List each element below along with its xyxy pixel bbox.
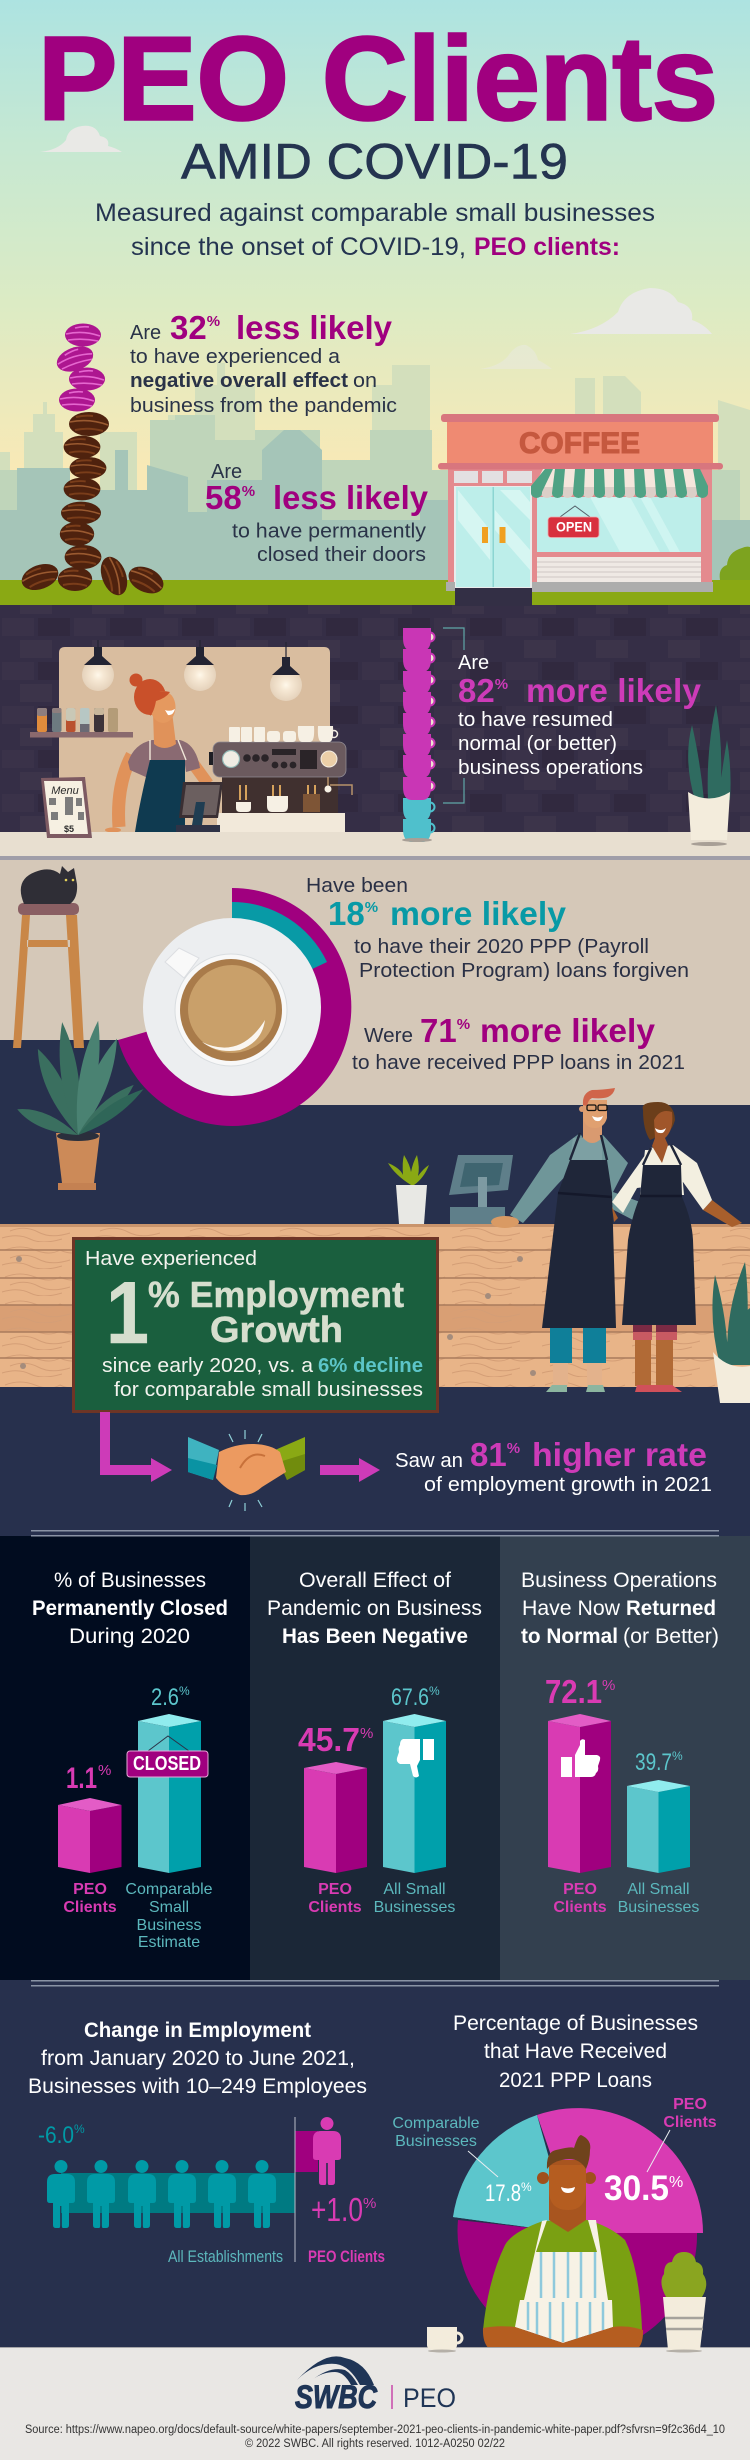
- stat: 81% higher rate: higher rate: [532, 1436, 707, 1473]
- lower navy section: [0, 1980, 750, 2348]
- stat: 32% less likely: Are: [130, 322, 161, 344]
- man: [491, 1088, 640, 1392]
- intro text: PEO clients:: [474, 233, 620, 261]
- chalkboard comparison: since early 2020, vs. a: [102, 1355, 314, 1377]
- spice shelf: [30, 708, 133, 738]
- stat: 18% more likely: %: [365, 899, 378, 916]
- woman: [612, 1102, 742, 1392]
- arrow from chalkboard: [100, 1412, 172, 1482]
- heading: [521, 1569, 719, 1648]
- stat: 58% less likely: closed their doors: [257, 544, 426, 566]
- bar: PEO clients 72.1%: 72.1: [545, 1673, 602, 1710]
- bar: comparable 2.6%: 2.6: [151, 1684, 179, 1711]
- coffee bean stack: [53, 324, 109, 569]
- donut chart with coffee cup: [118, 888, 351, 1126]
- stat: 71% more likely: 71: [420, 1012, 457, 1049]
- open sign: [548, 506, 599, 538]
- intro text: since the onset of COVID-19,: [131, 233, 466, 261]
- stat: 71% more likely: %: [457, 1016, 470, 1033]
- couple of baristas: [491, 1088, 742, 1392]
- bar labels: All Small: [383, 1881, 446, 1898]
- chart labels: PEO Clients: [308, 2247, 385, 2266]
- pie chart labels: [392, 2096, 717, 2208]
- counter top: [0, 832, 750, 860]
- logo: SWBC PEO: [295, 2356, 456, 2415]
- panel: permanently closed: [32, 1569, 228, 1951]
- bar: PEO clients 1.1%: %: [98, 1762, 111, 1779]
- closed sign: [127, 1736, 208, 1777]
- stat: 71% more likely: to have received PPP loans in 2021: [352, 1052, 685, 1074]
- espresso machine: [209, 726, 352, 832]
- ground: [0, 580, 750, 606]
- chalk headline: 1: [106, 1263, 149, 1362]
- heading: to Normal: [521, 1625, 618, 1648]
- chalk headline: % Employment: [148, 1274, 404, 1315]
- city skyline: [0, 363, 750, 585]
- bar labels: PEO: [563, 1881, 597, 1898]
- change in employment heading: from January 2020 to June 2021,: [41, 2047, 355, 2070]
- icon: thumbs up: [561, 1739, 600, 1777]
- PPP loans heading: that Have Received: [484, 2040, 667, 2063]
- value: all establishments: -6.0: [38, 2122, 74, 2149]
- intro text: [95, 199, 655, 261]
- bar labels: Clients: [308, 1899, 362, 1916]
- bar: PEO clients 72.1%: %: [602, 1677, 615, 1694]
- shop sign: COFFEE: [519, 427, 640, 460]
- stat: 58% less likely: less likely: [273, 479, 429, 516]
- stat: 18% more likely: Protection Program) loans forgiven: [359, 960, 689, 982]
- heading: Returned: [626, 1597, 716, 1620]
- bar labels: Comparable: [125, 1881, 213, 1898]
- bar: PEO clients 45.7%: [298, 1721, 373, 1873]
- teal people: [47, 2160, 276, 2228]
- heading: Have Now: [522, 1597, 621, 1620]
- pie chart labels: PEO: [673, 2096, 707, 2113]
- source note: Source: https://www.napeo.org/docs/default-source/white-papers/september-2021-peo-clients-in-pandemic-white-paper.pdf?sfvrsn=9f2c36d4_10: [25, 2424, 725, 2436]
- stat: 81% higher rate: %: [507, 1440, 520, 1457]
- stat: 81% higher rate: Saw an: [395, 1450, 463, 1472]
- bar labels: Estimate: [138, 1934, 200, 1951]
- bar stool with cat: [13, 866, 84, 1048]
- bar: all small 39.7%: [627, 1749, 690, 1873]
- pie chart labels: 30.5: [604, 2169, 669, 2208]
- logo: SWBC PEO: SWBC: [295, 2379, 378, 2415]
- coffee cup: [427, 2327, 462, 2352]
- stat: 18% more likely: Have been: [306, 875, 408, 897]
- barista: [105, 674, 208, 832]
- stat: 82% more likely: %: [495, 676, 508, 693]
- bar: PEO clients 45.7%: 45.7: [298, 1721, 360, 1758]
- coffee shop: [438, 414, 723, 606]
- heading: [267, 1569, 482, 1648]
- brick wall: [0, 605, 750, 833]
- pie chart labels: Comparable: [392, 2115, 480, 2132]
- change in employment heading: Change in Employment: [84, 2019, 311, 2042]
- bar: PEO clients 1.1%: 1.1: [66, 1762, 97, 1795]
- stat: 82% more likely: business operations: [458, 757, 643, 779]
- stat: 71% more likely: [352, 1012, 685, 1074]
- bar labels: PEO: [73, 1881, 107, 1898]
- stacked cups: [402, 628, 434, 842]
- bar: PEO clients 72.1%: [545, 1673, 615, 1873]
- heading: Permanently Closed: [32, 1597, 228, 1620]
- logo: SWBC PEO: PEO: [403, 2383, 456, 2413]
- bar: comparable 2.6%: [138, 1684, 201, 1873]
- heading: % of Businesses: [54, 1569, 206, 1592]
- chalkboard comparison: for comparable small businesses: [114, 1379, 423, 1401]
- stat: 18% more likely: more likely: [390, 895, 567, 932]
- bar labels: [63, 1881, 213, 1951]
- stat: 82% more likely: normal (or better): [458, 733, 617, 755]
- chalkboard comparison: 6% decline: [318, 1355, 423, 1377]
- stat: 71% more likely: more likely: [480, 1012, 656, 1049]
- chart labels: [168, 2247, 385, 2266]
- bar: all small 67.6%: %: [429, 1684, 440, 1698]
- footer band: [0, 2347, 750, 2460]
- bar: all small 39.7%: %: [672, 1749, 683, 1763]
- awning: [531, 469, 708, 498]
- clouds: [40, 126, 712, 369]
- stat: 82% more likely: [458, 652, 702, 779]
- pendant lamps: [82, 640, 302, 701]
- chalkboard comparison: [102, 1355, 423, 1401]
- pie chart labels: Businesses: [395, 2133, 477, 2150]
- stat: 81% higher rate: 81: [470, 1436, 507, 1473]
- menu board: $5: [64, 824, 74, 834]
- bar: all small 67.6%: 67.6: [391, 1684, 429, 1711]
- barista portrait: [483, 2135, 643, 2353]
- pie chart labels: 17.8: [485, 2180, 521, 2207]
- stat: 32% less likely: less likely: [236, 309, 393, 346]
- copyright: © 2022 SWBC. All rights reserved. 1012-A0250 02/22: [245, 2438, 505, 2450]
- magenta person: [313, 2117, 341, 2185]
- heading: (or Better): [623, 1625, 719, 1648]
- sky background: [0, 0, 750, 585]
- stat: 32% less likely: %: [207, 313, 220, 330]
- bar: PEO clients 1.1%: [58, 1762, 122, 1873]
- stat: 81% higher rate: of employment growth in 2021: [424, 1474, 712, 1496]
- pie chart labels: Clients: [663, 2114, 717, 2131]
- bar labels: [553, 1881, 699, 1916]
- pie chart: [453, 2108, 703, 2335]
- stat: 71% more likely: Were: [364, 1025, 413, 1047]
- panel: overall effect negative: [267, 1569, 482, 1916]
- pie chart labels: %: [669, 2174, 683, 2191]
- heading: Business Operations: [521, 1569, 717, 1592]
- employment change chart: [38, 2117, 385, 2266]
- heading: Has Been Negative: [282, 1625, 468, 1648]
- stat: 32% less likely: 32: [170, 309, 207, 346]
- intro text: Measured against comparable small businesses: [95, 199, 655, 227]
- stat: 18% more likely: to have their 2020 PPP (Payroll: [354, 936, 649, 958]
- title: PEO Clients: [38, 12, 718, 146]
- stat: 58% less likely: [205, 461, 429, 566]
- bar labels: PEO: [318, 1881, 352, 1898]
- closed sign: CLOSED: [133, 1753, 201, 1775]
- stat: 32% less likely: to have experienced a: [130, 346, 341, 368]
- stat: 82% more likely: to have resumed: [458, 709, 613, 731]
- open sign: OPEN: [556, 518, 592, 534]
- panel: returned to normal: [521, 1569, 719, 1916]
- navy section background: [0, 1040, 750, 1536]
- bar labels: Businesses: [374, 1899, 455, 1916]
- register: [449, 1155, 513, 1224]
- menu board: Menu: [51, 785, 79, 797]
- stat: 82% more likely: Are: [458, 652, 489, 674]
- heading: During 2020: [69, 1625, 190, 1648]
- value: PEO clients: %: [363, 2195, 376, 2212]
- heading: [32, 1569, 228, 1648]
- PPP loans heading: [453, 2012, 698, 2092]
- cafe wall panel: [59, 647, 330, 832]
- subtitle: AMID COVID-19: [181, 134, 568, 190]
- stat: 82% more likely: more likely: [526, 672, 702, 709]
- door: [454, 486, 532, 588]
- stat: 58% less likely: Are: [211, 461, 242, 483]
- wood counter: [0, 1224, 750, 1387]
- bar labels: Business: [137, 1917, 201, 1934]
- flower pot: [661, 2252, 706, 2352]
- icon: thumbs down: [397, 1739, 434, 1778]
- bracket: [443, 628, 464, 803]
- dark panel backgrounds: [0, 1530, 750, 1980]
- snake plant: [688, 705, 731, 846]
- bush: [720, 547, 750, 580]
- stat: 32% less likely: business from the pandemic: [130, 395, 397, 417]
- menu board: [41, 777, 92, 838]
- bar labels: Clients: [63, 1899, 117, 1916]
- fallen beans: [18, 553, 168, 599]
- stat: 18% more likely: [306, 875, 689, 982]
- bar labels: All Small: [627, 1881, 690, 1898]
- change in employment heading: [28, 2019, 367, 2098]
- PPP loans heading: Percentage of Businesses: [453, 2012, 698, 2035]
- window: [537, 497, 701, 582]
- chalk headline: Growth: [210, 1309, 343, 1350]
- bar: PEO clients 45.7%: %: [360, 1725, 373, 1742]
- heading: Overall Effect of: [299, 1569, 451, 1592]
- bar labels: Businesses: [618, 1899, 699, 1916]
- snake plant right: [712, 1262, 750, 1403]
- small plant: [388, 1155, 429, 1224]
- bar: all small 67.6%: [383, 1684, 446, 1873]
- icon: handshake: [188, 1430, 305, 1511]
- beige section background: [0, 860, 750, 1105]
- bar labels: Small: [149, 1899, 189, 1916]
- stat: 18% more likely: 18: [328, 895, 365, 932]
- chart labels: All Establishments: [168, 2247, 283, 2266]
- stat: 81% higher rate: [395, 1436, 712, 1496]
- value: PEO clients: +1.0: [311, 2191, 363, 2228]
- bar labels: [308, 1881, 455, 1916]
- bar labels: Clients: [553, 1899, 607, 1916]
- bar: all small 39.7%: 39.7: [635, 1749, 672, 1776]
- change in employment heading: Businesses with 10–249 Employees: [28, 2075, 367, 2098]
- potted plant: [15, 1019, 147, 1190]
- value: all establishments: %: [74, 2122, 85, 2136]
- stat: 58% less likely: %: [242, 483, 255, 500]
- stat: 82% more likely: 82: [458, 672, 495, 709]
- chalkboard intro: Have experienced: [85, 1248, 257, 1270]
- stat: 58% less likely: 58: [205, 479, 242, 516]
- arrow to stat: [320, 1458, 380, 1482]
- stat: 32% less likely: [130, 309, 397, 417]
- chalk headline: [106, 1263, 404, 1362]
- pie chart labels: %: [521, 2180, 532, 2194]
- bar: comparable 2.6%: %: [179, 1684, 190, 1698]
- stat: 32% less likely: negative overall effect: [130, 370, 348, 392]
- PPP loans heading: 2021 PPP Loans: [499, 2069, 652, 2092]
- point of sale terminal: [176, 782, 223, 832]
- stat: 58% less likely: to have permanently: [232, 520, 426, 542]
- heading: Pandemic on Business: [267, 1597, 482, 1620]
- chalkboard callout: [74, 1238, 438, 1412]
- stat: 32% less likely: on: [353, 370, 377, 392]
